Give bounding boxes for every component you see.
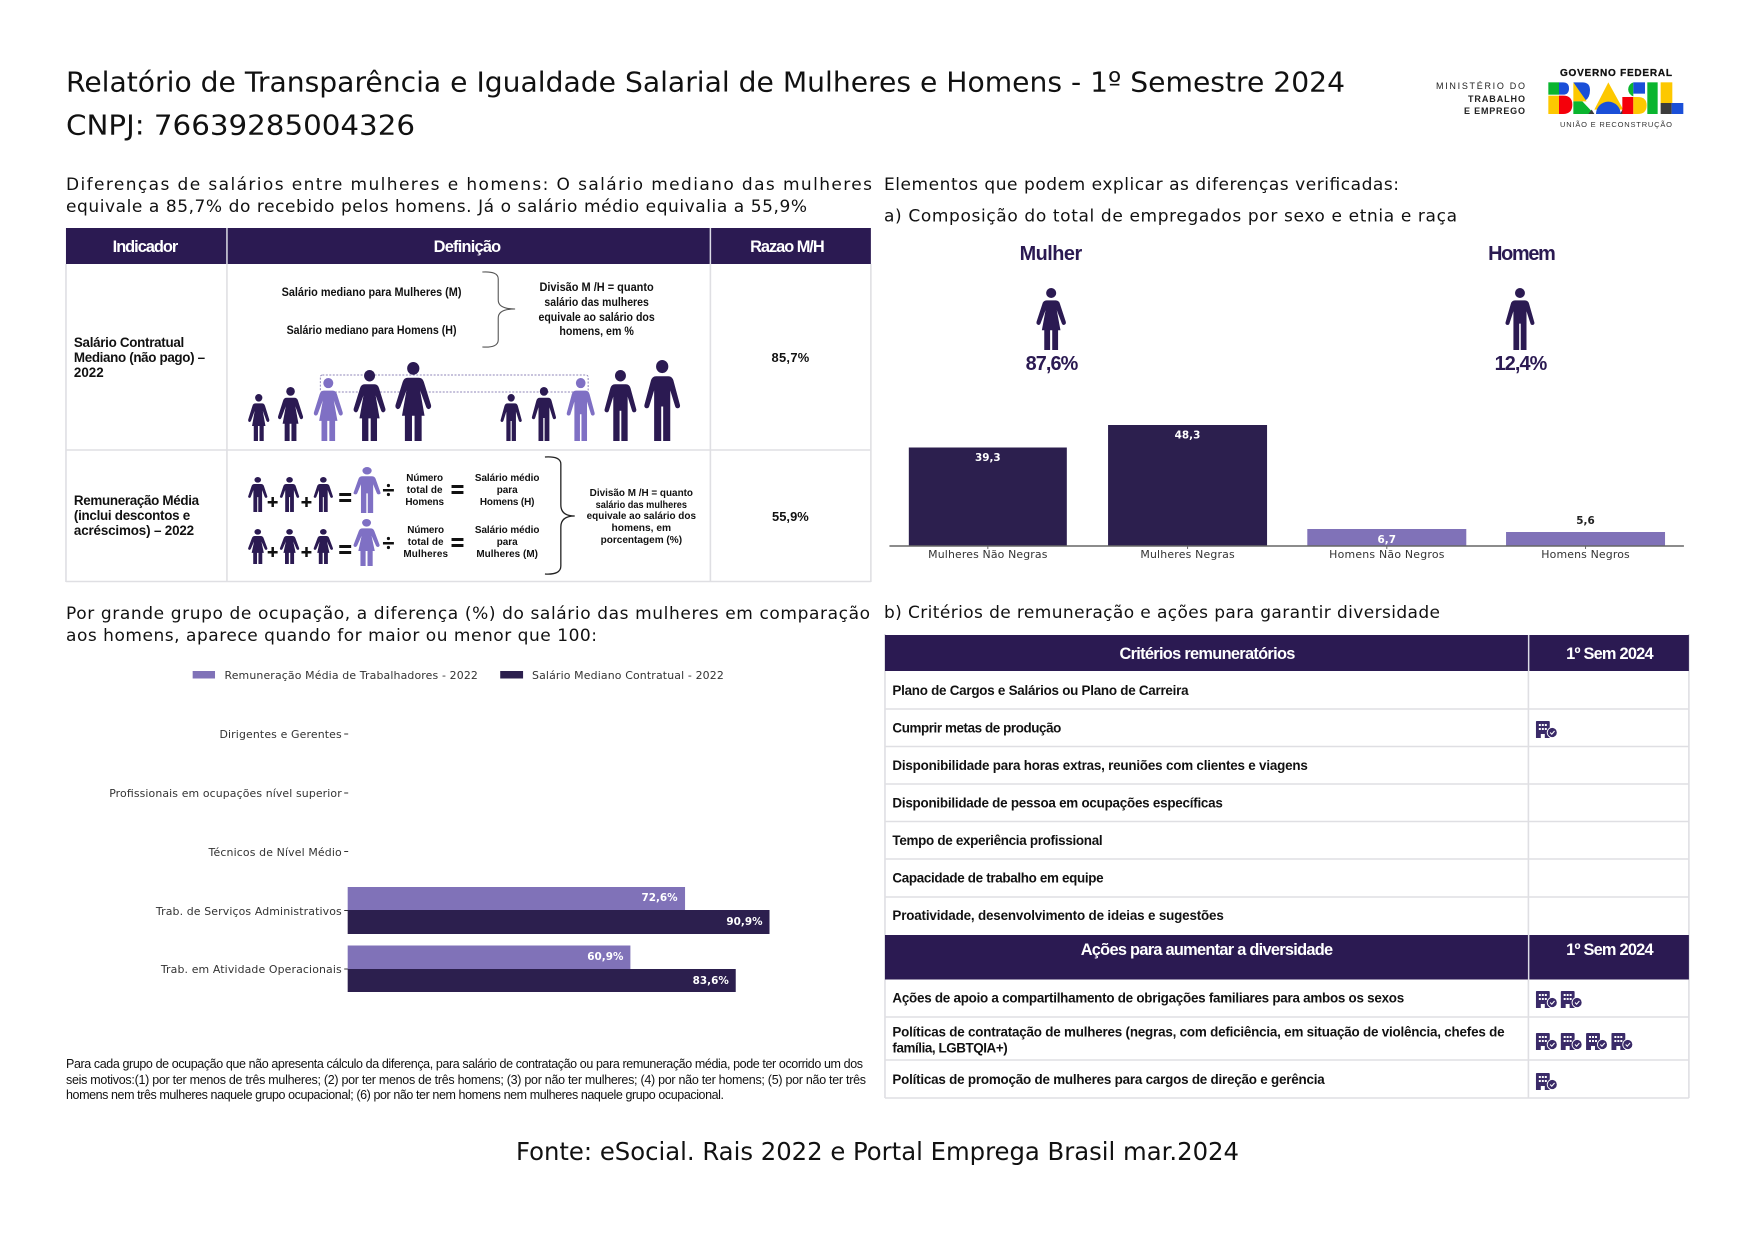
person: mulher 87,6%: Mulher <box>1020 243 1082 265</box>
header: critérios remuneratórios: 1º Sem 2024 <box>1566 645 1654 663</box>
text: por grande grupo: Por grande grupo de ocupação, a diferença (%) do salário das mulheres em comparação <box>66 604 870 624</box>
row: remuneração média: (inclui descontos e <box>74 508 191 523</box>
criteria rows: Disponibilidade de pessoa em ocupações específicas <box>892 795 1223 811</box>
legend: Remuneração Média de Trabalhadores - 2022 <box>224 669 478 682</box>
text: elementos que podem explicar: Elementos que podem explicar as diferenças verificadas: <box>884 175 1399 195</box>
formula: homens: total de <box>407 485 443 496</box>
heading: composição: a) Composição do total de empregados por sexo e etnia e raça <box>884 206 1457 226</box>
person: homem 12,4%: 12,4% <box>1495 353 1548 375</box>
text: diferenças de salários <box>66 175 872 217</box>
bar chart: composition: 6,7 <box>1378 534 1396 546</box>
logo: ministério: MINISTÉRIO DO <box>1436 81 1525 91</box>
icons: men by height <box>501 360 680 441</box>
logo: governo federal brasil <box>1548 68 1683 129</box>
formula: homens <box>248 467 539 513</box>
bar chart: composition: Mulheres Negras <box>1140 548 1235 561</box>
note: Para cada grupo de ocupação que não apresenta cálculo da diferença, para salário de contratação ou para remuneração média, pode ter ocorrido um dos <box>66 1057 863 1071</box>
definition: mediano labels <box>282 287 462 337</box>
bar chart: occupation <box>109 728 770 992</box>
icons: company check row 1 <box>1536 991 1583 1008</box>
criteria rows: Capacidade de trabalho em equipe <box>892 870 1104 886</box>
icons: company check row 2 <box>1536 1033 1633 1050</box>
header: ações para diversidade <box>885 935 1689 980</box>
bar chart: occupation: Trab. de Serviços Administrativos <box>155 905 342 918</box>
criteria rows <box>892 683 1308 923</box>
formula: homens: Homens <box>405 497 445 508</box>
text: divisão M/H percent: equivale ao salário dos <box>587 511 696 522</box>
text: divisão M/H: equivale ao salário dos <box>538 312 655 324</box>
text: divisão M/H: salário das mulheres <box>544 297 649 309</box>
logo: ministério: TRABALHO <box>1468 94 1525 104</box>
bar chart: composition: Homens Não Negros <box>1329 548 1445 561</box>
legend: Salário Mediano Contratual - 2022 <box>532 669 724 682</box>
legend <box>193 669 724 682</box>
formula: mulheres: Salário médio <box>475 525 539 536</box>
logo: governo federal brasil: GOVERNO FEDERAL <box>1560 68 1672 79</box>
panel: indicator table <box>66 228 871 582</box>
icon: company check row 3 <box>1536 1073 1558 1090</box>
logo: ministério: E EMPREGO <box>1464 106 1525 116</box>
criteria rows: Proatividade, desenvolvimento de ideias e sugestões <box>892 908 1224 923</box>
bar chart: composition: 5,6 <box>1576 515 1595 527</box>
table header: Razao M/H <box>750 238 825 256</box>
person: mulher 87,6% <box>1020 243 1082 375</box>
title: Relatório de Transparência e Igualdade Salarial de Mulheres e Homens - 1º Semestre 2024 <box>66 66 1345 98</box>
action rows: Políticas de contratação de mulheres (negras, com deficiência, em situação de violência, chefes de <box>892 1024 1505 1040</box>
bar chart: composition: 39,3 <box>975 452 1001 464</box>
person: mulher 87,6%: 87,6% <box>1026 353 1079 375</box>
row: remuneração média: acréscimos) – 2022 <box>74 523 194 538</box>
row: salário contratual: Mediano (não pago) – <box>74 350 206 365</box>
bar chart: occupation: Dirigentes e Gerentes <box>219 728 342 741</box>
icons: women by height <box>248 362 431 441</box>
table header <box>66 228 871 264</box>
title: CNPJ: 76639285004326 <box>66 108 415 142</box>
row: salário contratual: 85,7% <box>772 350 810 365</box>
brace <box>482 272 515 347</box>
criteria rows: Plano de Cargos e Salários ou Plano de Carreira <box>892 683 1189 698</box>
table header: Definição <box>434 238 501 256</box>
text: divisão M/H percent: homens, em <box>612 523 671 534</box>
formula: homens: para <box>497 485 518 496</box>
formula: homens: Salário médio <box>475 473 539 484</box>
text: divisão M/H percent: porcentagem (%) <box>601 535 682 546</box>
action rows <box>892 990 1505 1087</box>
text: por grande grupo <box>66 604 870 646</box>
logo: ministério <box>1436 81 1525 116</box>
bar chart: occupation: 90,9% <box>726 916 763 928</box>
action rows: Ações de apoio a compartilhamento de obrigações familiares para ambos os sexos <box>892 990 1404 1006</box>
note: homens nem três mulheres naquele grupo ocupacional; (6) por não ter nem homens nem mulheres naquele grupo ocupacional. <box>66 1088 724 1102</box>
header: critérios remuneratórios: Critérios remuneratórios <box>1119 645 1295 663</box>
panel: criteria table <box>885 634 1689 1098</box>
bar chart: composition: 48,3 <box>1175 429 1200 442</box>
text: diferenças de salários: equivale a 85,7% do recebido pelos homens. Já o salário médio equivalia a 55,9% <box>66 197 807 217</box>
person: homem 12,4% <box>1488 243 1556 375</box>
formula: mulheres: Mulheres (M) <box>476 549 538 560</box>
icon: company check <box>1536 721 1558 738</box>
definition: mediano labels: Salário mediano para Mulheres (M) <box>282 287 462 299</box>
formula: mulheres: total de <box>408 537 444 548</box>
bar chart: occupation: Técnicos de Nível Médio <box>208 846 342 859</box>
logo: governo federal brasil: UNIÃO E RECONSTRUÇÃO <box>1560 120 1672 129</box>
source: Fonte: eSocial. Rais 2022 e Portal Emprega Brasil mar.2024 <box>516 1137 1239 1166</box>
text: divisão M/H <box>538 282 655 338</box>
action rows: Políticas de promoção de mulheres para cargos de direção e gerência <box>892 1072 1325 1087</box>
formula: mulheres: Número <box>407 525 444 536</box>
bar chart: occupation: Trab. em Atividade Operacionais <box>160 963 342 976</box>
text: divisão M/H: homens, em % <box>559 326 634 338</box>
heading: critérios: b) Critérios de remuneração e ações para garantir diversidade <box>884 603 1440 623</box>
text: divisão M/H percent: salário das mulheres <box>596 500 687 511</box>
row: salário contratual: Salário Contratual <box>74 335 184 350</box>
row: remuneração média: 55,9% <box>772 509 809 524</box>
bar chart: composition <box>889 425 1684 561</box>
note <box>66 1057 866 1102</box>
header: ações para diversidade: 1º Sem 2024 <box>1566 941 1654 959</box>
criteria rows: Tempo de experiência profissional <box>892 833 1103 848</box>
criteria rows: Disponibilidade para horas extras, reuniões com clientes e viagens <box>892 758 1308 773</box>
formula: mulheres <box>248 519 539 566</box>
header: critérios remuneratórios <box>885 635 1689 671</box>
table header: Indicador <box>113 238 179 256</box>
row: remuneração média <box>74 493 809 538</box>
median dashed box <box>320 375 588 392</box>
note: seis motivos:(1) por ter menos de três mulheres; (2) por ter menos de três homens; (3) por não ter mulheres; (4) por não ter homens; (5) por não ter três <box>66 1073 866 1087</box>
bar chart: occupation: 72,6% <box>641 892 678 904</box>
criteria rows: Cumprir metas de produção <box>892 720 1061 736</box>
title <box>66 66 1345 142</box>
header: ações para diversidade: Ações para aumentar a diversidade <box>1081 941 1333 959</box>
bar chart: occupation: Profissionais em ocupações nível superior <box>109 787 342 800</box>
bar chart: composition: Homens Negros <box>1541 548 1630 561</box>
formula: mulheres: para <box>497 537 518 548</box>
text: por grande grupo: aos homens, aparece quando for maior ou menor que 100: <box>66 626 597 646</box>
formula: homens: Número <box>406 473 443 484</box>
text: divisão M/H: Divisão M /H = quanto <box>539 282 654 294</box>
formula: homens: Homens (H) <box>480 497 535 508</box>
row: remuneração média: Remuneração Média <box>74 493 200 508</box>
text: diferenças de salários: Diferenças de salários entre mulheres e homens: O salário mediano das mulheres <box>66 175 872 195</box>
text: divisão M/H percent <box>587 488 696 546</box>
person: homem 12,4%: Homem <box>1488 243 1556 265</box>
bar chart: occupation: 60,9% <box>587 951 624 963</box>
row: salário contratual: 2022 <box>74 365 104 380</box>
brace <box>545 457 575 574</box>
action rows: família, LGBTQIA+) <box>892 1040 1008 1056</box>
definition: mediano labels: Salário mediano para Homens (H) <box>287 325 457 337</box>
formula: mulheres: Mulheres <box>403 549 448 560</box>
text: divisão M/H percent: Divisão M /H = quanto <box>590 488 693 499</box>
bar chart: composition: Mulheres Não Negras <box>928 548 1048 561</box>
row: salário contratual <box>74 335 810 380</box>
bar chart: occupation: 83,6% <box>693 975 729 987</box>
